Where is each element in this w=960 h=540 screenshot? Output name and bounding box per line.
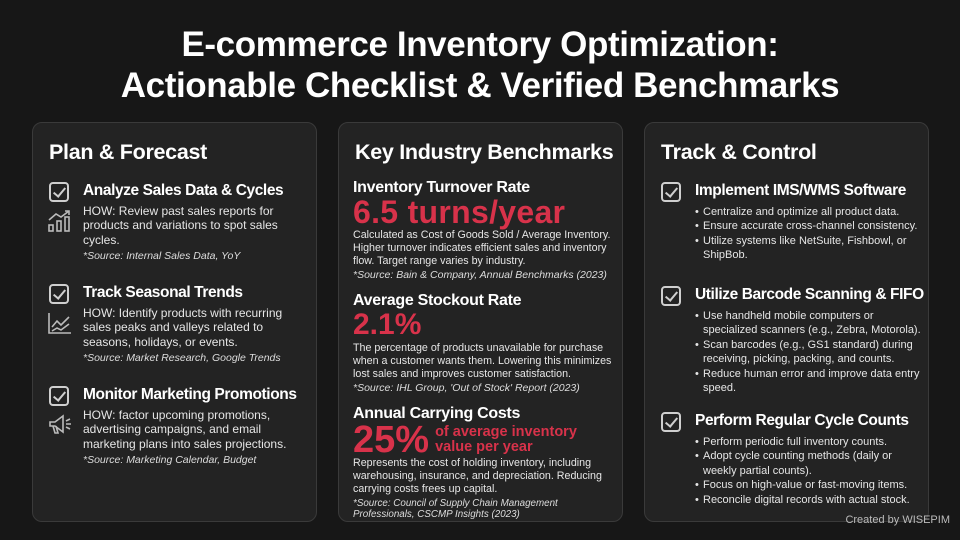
text: HOW: Review past sales reports for products and variations to spot sales cycles. (83, 204, 278, 247)
benchmark: carrying costs: *Source: Council of Supply Chain Management Professionals, CSCMP Insights (2023) (353, 498, 558, 520)
list: Utilize systems like NetSuite, Fishbowl, or ShipBob. (703, 235, 907, 261)
title (121, 25, 839, 105)
list: Focus on high-value or fast-moving items. (703, 479, 907, 491)
heading: Perform Regular Cycle Counts (695, 412, 909, 429)
item: IMS/WMS (661, 182, 917, 261)
icon: checkbox (661, 182, 681, 202)
benchmark: stockout: *Source: IHL Group, 'Out of Stock' Report (2023) (353, 382, 580, 394)
panel: plan & forecast (32, 122, 317, 522)
heading: Monitor Marketing Promotions (83, 386, 297, 403)
heading: Analyze Sales Data & Cycles (83, 182, 283, 199)
icon: checkbox (661, 412, 681, 432)
benchmark: carrying costs: Annual Carrying Costs (353, 405, 520, 422)
text: *Source: Marketing Calendar, Budget (83, 454, 256, 466)
heading: Utilize Barcode Scanning & FIFO (695, 286, 924, 303)
heading: track & control: Track & Control (661, 140, 817, 164)
icon: checkbox (49, 386, 69, 406)
item: seasonal trends (48, 284, 282, 364)
text: HOW: Identify products with recurring sales peaks and valleys related to seasons, holidays, or events. (83, 306, 282, 349)
list (695, 310, 921, 394)
icon: checkbox (49, 182, 69, 202)
heading: Track Seasonal Trends (83, 284, 243, 301)
credit: Created by WISEPIM (845, 514, 950, 526)
heading: Implement IMS/WMS Software (695, 182, 906, 199)
heading: plan & forecast: Plan & Forecast (49, 140, 207, 164)
benchmark: carrying costs (353, 405, 602, 520)
benchmark: carrying costs: of average inventory (435, 424, 577, 440)
list: Ensure accurate cross-channel consistency. (703, 220, 917, 232)
text: *Source: Internal Sales Data, YoY (83, 250, 240, 262)
benchmark: turnover: 6.5 turns/year (353, 194, 565, 230)
icon: trend (48, 313, 71, 334)
item: cycle counts (661, 412, 910, 506)
list (695, 206, 917, 261)
benchmark: carrying costs: Represents the cost of holding inventory, including warehousing, insurance, and depreciation. Reducing carrying costs frees up capital. (353, 457, 602, 495)
benchmark: carrying costs: 25% (353, 419, 429, 461)
benchmark: turnover: Inventory Turnover Rate (353, 179, 530, 196)
item: marketing promotions (49, 386, 297, 466)
benchmark: carrying costs: value per year (435, 439, 533, 455)
title: E-commerce Inventory Optimization: (181, 25, 779, 64)
text: HOW: factor upcoming promotions, advertising campaigns, and email marketing plans into sales projections. (83, 408, 286, 451)
list (695, 436, 910, 506)
list: Reduce human error and improve data entry speed. (703, 368, 919, 394)
icon: megaphone (49, 414, 71, 434)
item: barcode (661, 286, 924, 394)
panel: key industry benchmarks (338, 122, 623, 522)
list: Adopt cycle counting methods (daily or weekly partial counts). (703, 450, 892, 477)
benchmark: stockout: Average Stockout Rate (353, 292, 521, 309)
benchmark: stockout: The percentage of products unavailable for purchase when a customer wants them. Lowering this minimizes lost sales and improves customer satisfaction. (353, 342, 611, 380)
panel: track & control (644, 122, 929, 522)
benchmark: stockout (353, 292, 611, 394)
list: Reconcile digital records with actual stock. (703, 494, 910, 506)
list: Centralize and optimize all product data. (703, 206, 899, 218)
icon: checkbox (661, 286, 681, 306)
benchmark: turnover (353, 179, 610, 281)
icon: chart (48, 210, 70, 232)
list: Scan barcodes (e.g., GS1 standard) during receiving, picking, packing, and counts. (703, 339, 913, 365)
icon: checkbox (49, 284, 69, 304)
benchmark: turnover: *Source: Bain & Company, Annual Benchmarks (2023) (353, 269, 607, 281)
benchmark: stockout: 2.1% (353, 308, 421, 341)
benchmark: turnover: Calculated as Cost of Goods Sold / Average Inventory. Higher turnover indicates efficient sales and inventory flow. Target range varies by industry. (353, 229, 610, 267)
text: *Source: Market Research, Google Trends (83, 352, 281, 364)
list: Perform periodic full inventory counts. (703, 436, 887, 448)
heading: benchmarks: Key Industry Benchmarks (355, 140, 613, 164)
item: analyze sales (48, 182, 283, 262)
list: Use handheld mobile computers or specialized scanners (e.g., Zebra, Motorola). (703, 310, 921, 336)
title: Actionable Checklist & Verified Benchmarks (121, 66, 839, 105)
